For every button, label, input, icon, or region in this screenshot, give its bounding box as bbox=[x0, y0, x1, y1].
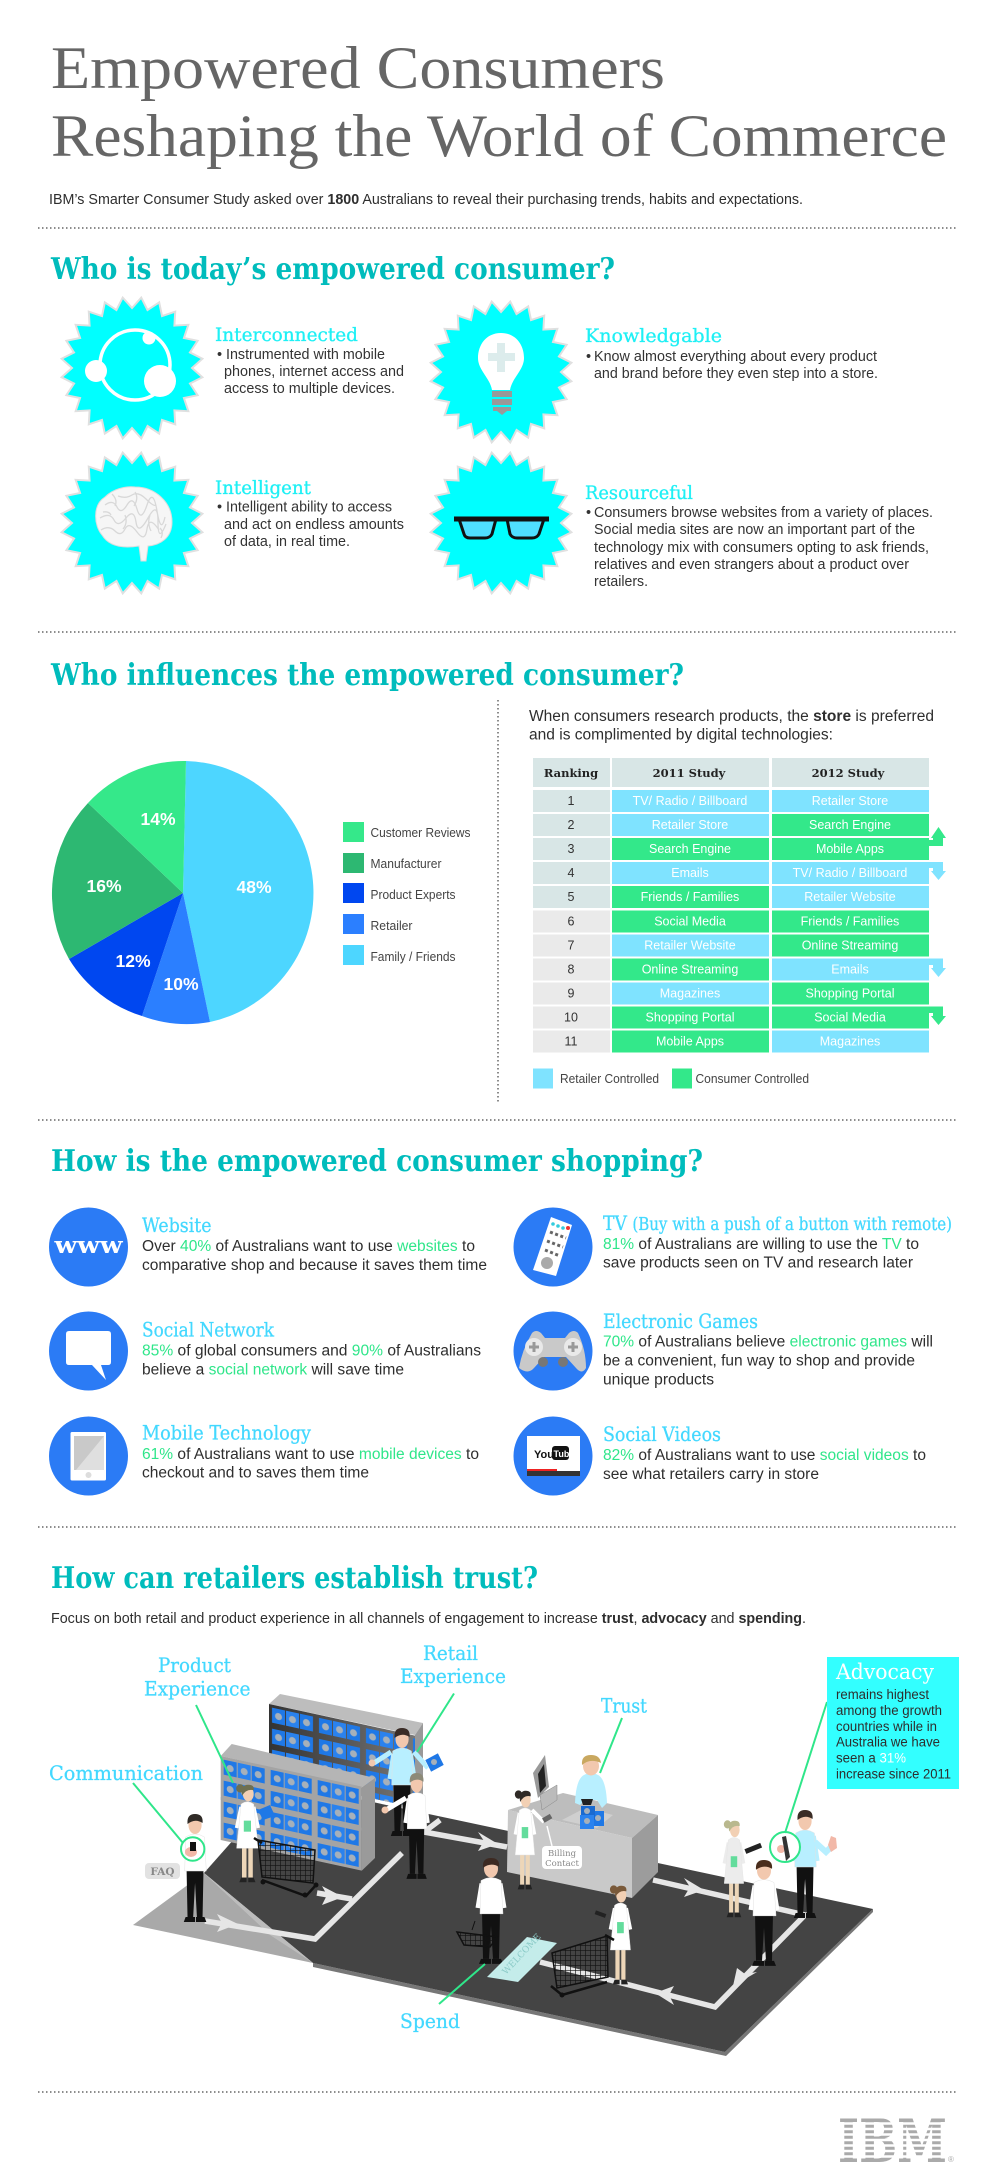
text: intelligent: of data, in real time. bbox=[224, 534, 350, 550]
shopping basket bbox=[457, 1921, 497, 1947]
row 8: Emails bbox=[831, 962, 869, 976]
row 1: Retailer Store bbox=[812, 794, 888, 808]
row 1: 1 bbox=[568, 794, 575, 808]
item: tv: TV (Buy with a push of a button with remote) bbox=[603, 1211, 952, 1235]
row 2: Search Engine bbox=[809, 818, 891, 832]
item: website: Over 40% of Australians want to use websites to bbox=[142, 1238, 475, 1255]
row 7 bbox=[533, 934, 929, 956]
icon: light bulb bbox=[421, 292, 581, 452]
text: interconnected: phones, internet access and bbox=[224, 364, 404, 380]
text: resourceful: • bbox=[586, 505, 591, 521]
text: interconnected: access to multiple devices. bbox=[224, 381, 395, 397]
floor bbox=[133, 1783, 873, 2056]
table legend bbox=[533, 1068, 809, 1088]
billing contact bubble: Billing bbox=[548, 1849, 577, 1859]
faq bubble: FAQ bbox=[150, 1866, 175, 1878]
table intro text: When consumers research products, the store is preferred bbox=[529, 708, 934, 725]
section: how can retailers establish trust bbox=[49, 1561, 959, 2056]
IBM logo: IBM bbox=[838, 2107, 947, 2177]
pie chart: 48% bbox=[236, 877, 272, 897]
text: knowledgable: Know almost everything about every product bbox=[594, 349, 877, 365]
arrow: down, emails bbox=[929, 958, 946, 977]
row 7: Online Streaming bbox=[802, 938, 898, 952]
person: woman at shelf bbox=[236, 1784, 258, 1882]
text: intelligent: Intelligent ability to access bbox=[226, 500, 392, 516]
icon: www bbox=[49, 1208, 128, 1286]
row 1 bbox=[533, 790, 929, 812]
row 5 bbox=[533, 886, 929, 908]
welcome mat bbox=[487, 1932, 557, 1982]
title bbox=[51, 35, 947, 169]
label: product experience: Experience bbox=[144, 1676, 250, 1700]
icon: youtube bbox=[514, 1416, 592, 1496]
item: social network: believe a social network will save time bbox=[142, 1362, 404, 1378]
advocacy callout: remains highest bbox=[836, 1687, 929, 1702]
row 3: Search Engine bbox=[649, 842, 731, 856]
text: resourceful: Consumers browse websites from a variety of places. bbox=[594, 505, 933, 521]
faq bubble bbox=[145, 1863, 180, 1879]
row 8 bbox=[533, 958, 929, 980]
title: Empowered Consumers bbox=[51, 35, 665, 101]
pie chart bbox=[52, 761, 313, 1024]
item: social network: 85% of global consumers and 90% of Australians bbox=[142, 1342, 481, 1360]
row 5: Friends / Families bbox=[641, 890, 739, 904]
row 4: Emails bbox=[671, 866, 709, 880]
text: knowledgable bbox=[585, 325, 878, 382]
item: electronic games: Electronic Games bbox=[603, 1309, 758, 1333]
subtitle: IBM’s Smarter Consumer Study asked over 1800 Australians to reveal their purchasing trends, habits and expectations. bbox=[49, 191, 803, 208]
text: intelligent: and act on endless amounts bbox=[224, 517, 404, 533]
heading: Who influences the empowered consumer? bbox=[50, 658, 684, 693]
shopping cart 2 bbox=[551, 1935, 614, 1998]
icon: youtube: You bbox=[534, 1449, 554, 1461]
text: resourceful: Resourceful bbox=[585, 482, 693, 504]
pie chart: 14% bbox=[140, 809, 176, 829]
item: mobile technology: Mobile Technology bbox=[142, 1420, 312, 1444]
pie legend bbox=[343, 822, 470, 965]
text: interconnected: Interconnected bbox=[215, 324, 358, 346]
person: man at right white shirt bbox=[751, 1860, 777, 1966]
row 6: 6 bbox=[568, 914, 575, 928]
label: retail experience: Experience bbox=[400, 1664, 506, 1688]
arrow: down, tv radio billboard bbox=[929, 862, 946, 880]
row 4: TV/ Radio / Billboard bbox=[793, 866, 907, 880]
text: interconnected bbox=[215, 324, 404, 397]
section: how is the empowered consumer shopping bbox=[49, 1144, 952, 1496]
person: retail staff bbox=[368, 1728, 444, 1836]
heading: How is the empowered consumer shopping? bbox=[51, 1144, 703, 1179]
person: cashier bbox=[575, 1755, 607, 1808]
row 9: 9 bbox=[568, 986, 575, 1000]
person: man at shelf bbox=[382, 1773, 428, 1879]
table legend: Retailer Controlled bbox=[560, 1072, 659, 1086]
advocacy callout bbox=[827, 1657, 959, 1789]
pie legend: Product Experts bbox=[370, 888, 456, 902]
advocacy callout: Advocacy bbox=[835, 1660, 934, 1684]
person: woman with cart bbox=[595, 1885, 631, 1984]
title: Reshaping the World of Commerce bbox=[51, 103, 947, 169]
floor path with arrows bbox=[205, 1820, 805, 2007]
icon: youtube: Tube bbox=[554, 1449, 574, 1459]
table legend: Consumer Controlled bbox=[696, 1072, 809, 1086]
row 9 bbox=[533, 982, 929, 1004]
icon: remote control bbox=[514, 1208, 592, 1286]
billing contact bubble bbox=[542, 1846, 582, 1869]
person: man at right blue shirt bbox=[793, 1810, 837, 1918]
label: product experience: Product bbox=[158, 1653, 231, 1677]
pie chart: 12% bbox=[115, 951, 151, 971]
label: communication: Communication bbox=[49, 1761, 203, 1785]
pie legend: Customer Reviews bbox=[370, 826, 470, 840]
item: website: comparative shop and because it saves them time bbox=[142, 1257, 487, 1274]
highlight: tablet bbox=[770, 1832, 800, 1862]
item: electronic games: be a convenient, fun way to shop and provide bbox=[603, 1352, 915, 1370]
IBM logo: ® bbox=[948, 2155, 954, 2164]
row 3: 3 bbox=[568, 842, 575, 856]
icon: gamepad bbox=[514, 1312, 592, 1390]
label: product experience bbox=[144, 1653, 250, 1700]
text: resourceful: technology mix with consumers opting to ask friends, bbox=[594, 540, 929, 556]
pie legend: Manufacturer bbox=[370, 857, 442, 871]
text: intelligent: • bbox=[217, 500, 222, 516]
row 10: Shopping Portal bbox=[646, 1010, 734, 1024]
front shelf bbox=[221, 1744, 375, 1871]
row 11 bbox=[533, 1030, 929, 1052]
pie legend: Family / Friends bbox=[370, 950, 456, 964]
table intro text bbox=[529, 708, 934, 744]
table header: Ranking bbox=[544, 766, 598, 780]
text: knowledgable: and brand before they even step into a store. bbox=[594, 366, 878, 382]
row 6 bbox=[533, 910, 929, 932]
row 10: 10 bbox=[564, 1010, 578, 1024]
row 6: Friends / Families bbox=[801, 914, 899, 928]
item: social videos bbox=[514, 1416, 926, 1496]
item: mobile technology: checkout and to saves them time bbox=[142, 1464, 369, 1482]
item: mobile technology bbox=[49, 1416, 479, 1496]
table intro text: and is complimented by digital technologies: bbox=[529, 726, 833, 744]
item: tv bbox=[514, 1208, 952, 1286]
shopping cart 1 bbox=[254, 1838, 318, 1898]
icon: glasses bbox=[421, 443, 581, 603]
advocacy callout: increase since 2011 bbox=[836, 1766, 951, 1782]
row 11: Mobile Apps bbox=[656, 1034, 724, 1048]
text: interconnected: Instrumented with mobile bbox=[226, 347, 385, 363]
row 5: 5 bbox=[568, 890, 575, 904]
item: social videos: Social Videos bbox=[603, 1422, 721, 1446]
row 7: Retailer Website bbox=[644, 938, 736, 952]
item: electronic games: 70% of Australians believe electronic games will bbox=[603, 1334, 933, 1350]
section: who is today's empowered consumer bbox=[50, 252, 933, 603]
person: communication bbox=[183, 1814, 207, 1922]
row 11: 11 bbox=[565, 1034, 578, 1048]
section: who influences the empowered consumer bbox=[50, 658, 946, 1104]
billing contact bubble: Contact bbox=[545, 1859, 579, 1869]
text: knowledgable: • bbox=[586, 349, 591, 365]
label: spend: Spend bbox=[400, 2009, 460, 2033]
row 7: 7 bbox=[568, 938, 575, 952]
leader lines bbox=[133, 1694, 827, 2004]
person: woman at billing bbox=[515, 1790, 552, 1889]
row 10 bbox=[533, 1006, 929, 1028]
table header: 2012 Study bbox=[812, 766, 885, 780]
text: intelligent: Intelligent bbox=[215, 477, 311, 499]
pie legend: Retailer bbox=[370, 919, 412, 933]
text: intelligent bbox=[215, 477, 404, 550]
row 3 bbox=[533, 838, 929, 860]
advocacy callout: countries while in bbox=[836, 1719, 937, 1734]
advocacy callout: Australia we have bbox=[836, 1734, 940, 1750]
row 4 bbox=[533, 862, 929, 884]
icon: speech bubble bbox=[49, 1312, 128, 1390]
row 2: 2 bbox=[568, 818, 575, 832]
row 3: Mobile Apps bbox=[816, 842, 884, 856]
item: website bbox=[49, 1208, 487, 1286]
row 10: Social Media bbox=[814, 1010, 886, 1024]
table header bbox=[533, 758, 929, 787]
icon: brain bbox=[52, 443, 212, 603]
row 9: Magazines bbox=[660, 986, 720, 1000]
row 2: Retailer Store bbox=[652, 818, 728, 832]
store illustration bbox=[133, 1694, 873, 2056]
welcome mat: WELCOME bbox=[501, 1932, 544, 1977]
label: retail experience bbox=[400, 1641, 506, 1688]
product boxes on counter bbox=[580, 1806, 604, 1829]
advocacy callout: among the growth bbox=[836, 1703, 942, 1718]
item: electronic games bbox=[514, 1309, 933, 1390]
text: interconnected: • bbox=[217, 347, 222, 363]
item: tv: 81% of Australians are willing to use the TV to bbox=[603, 1236, 919, 1253]
person: man with basket bbox=[478, 1858, 504, 1964]
icon: tablet bbox=[49, 1416, 128, 1496]
label: retail experience: Retail bbox=[423, 1641, 478, 1665]
item: tv: save products seen on TV and research later bbox=[603, 1254, 913, 1272]
row 5: Retailer Website bbox=[804, 890, 896, 904]
advocacy callout: seen a 31% bbox=[836, 1750, 906, 1766]
row 8: 8 bbox=[568, 962, 575, 976]
product box held by woman bbox=[258, 1805, 275, 1820]
arrow: up, mobile apps bbox=[929, 827, 946, 846]
text: knowledgable: Knowledgable bbox=[585, 325, 722, 347]
item: social network: Social Network bbox=[142, 1318, 275, 1342]
row 6: Social Media bbox=[654, 914, 726, 928]
table header: 2011 Study bbox=[653, 766, 726, 780]
highlight: phone bbox=[181, 1837, 204, 1861]
ranking table bbox=[533, 758, 946, 1052]
item: mobile technology: 61% of Australians want to use mobile devices to bbox=[142, 1446, 479, 1463]
text: resourceful: retailers. bbox=[594, 574, 648, 590]
arrow: down, social media bbox=[929, 1006, 946, 1025]
icon: interconnected bbox=[52, 288, 212, 448]
row 1: TV/ Radio / Billboard bbox=[633, 794, 747, 808]
text: resourceful: Social media sites are now an important part of the bbox=[594, 522, 915, 538]
checkout counter bbox=[507, 1755, 658, 1898]
row 11: Magazines bbox=[820, 1034, 880, 1048]
item: social videos: 82% of Australians want to use social videos to bbox=[603, 1447, 926, 1464]
heading: How can retailers establish trust? bbox=[51, 1561, 538, 1596]
item: social network bbox=[49, 1312, 481, 1390]
row 9: Shopping Portal bbox=[806, 986, 894, 1000]
heading: Who is today’s empowered consumer? bbox=[50, 252, 615, 287]
pie chart: 16% bbox=[86, 876, 122, 896]
text: resourceful: relatives and even strangers about a product over bbox=[594, 557, 909, 573]
back shelf bbox=[269, 1694, 423, 1812]
label: trust: Trust bbox=[601, 1694, 647, 1718]
row 8: Online Streaming bbox=[642, 962, 738, 976]
icon: www: www bbox=[53, 1232, 124, 1259]
item: website: Website bbox=[142, 1213, 212, 1237]
person: woman at right bbox=[724, 1820, 762, 1917]
item: electronic games: unique products bbox=[603, 1372, 714, 1388]
item: social videos: see what retailers carry in store bbox=[603, 1466, 819, 1483]
pie chart: 10% bbox=[163, 974, 199, 994]
row 4: 4 bbox=[568, 866, 575, 880]
text: resourceful bbox=[585, 482, 933, 590]
row 2 bbox=[533, 814, 929, 836]
intro text: Focus on both retail and product experience in all channels of engagement to increase trust, advocacy and spending. bbox=[51, 1610, 806, 1627]
